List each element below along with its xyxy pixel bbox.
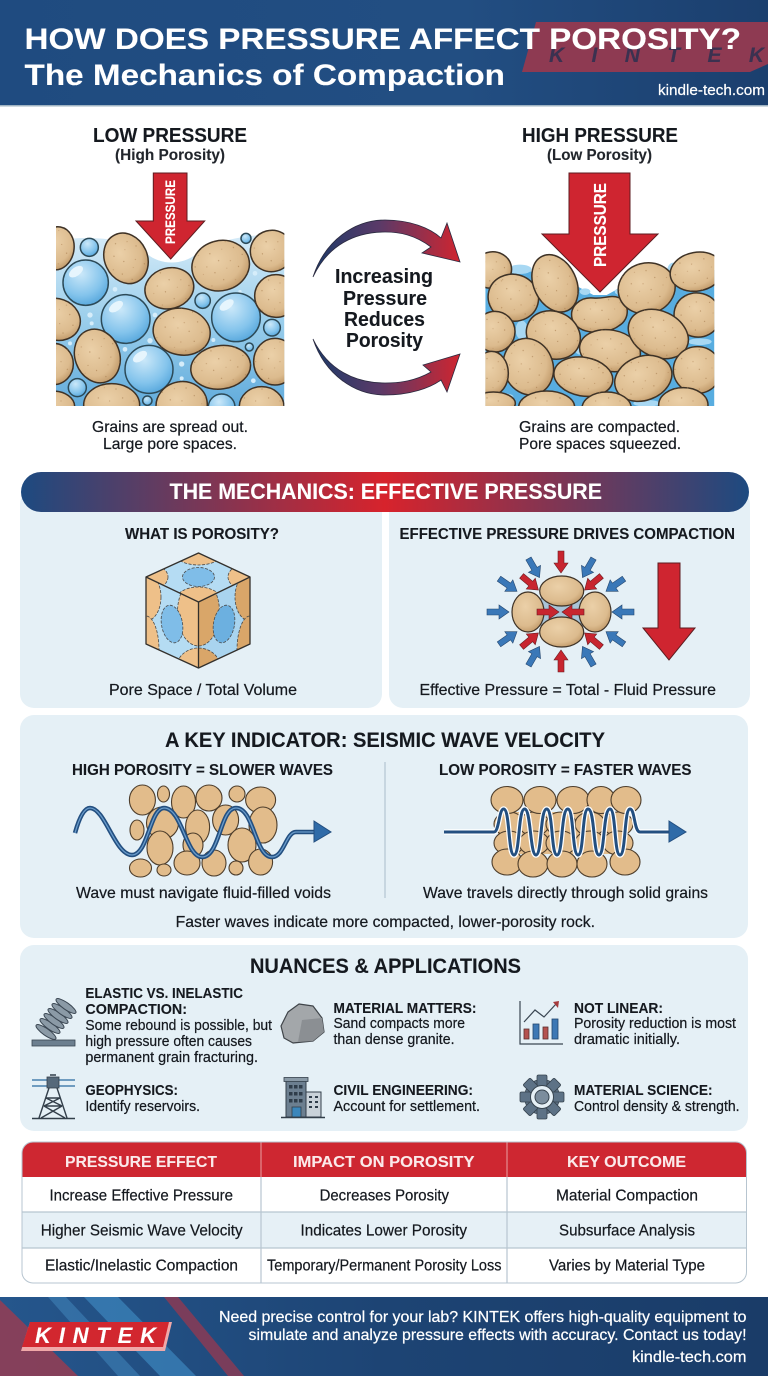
low pressure arrow [136,173,205,259]
text: material matters: Sand compacts more [334,1016,465,1032]
caption: slow wave: Wave must navigate fluid-filled voids [76,885,331,902]
footer banner [0,1297,768,1376]
text: elastic vs inelastic: ELASTIC VS. INELASTIC [85,985,243,1002]
text: geophysics: Identify reservoirs. [85,1099,200,1115]
text: material matters: MATERIAL MATTERS: [334,1000,476,1017]
low pressure heading [93,124,247,164]
text: elastic vs inelastic: high pressure often causes [85,1034,252,1050]
panel: what is porosity [20,490,382,708]
table row 1: Material Compaction [556,1188,698,1205]
heading: effective pressure: EFFECTIVE PRESSURE DRIVES COMPACTION [400,526,735,543]
high pressure heading [522,124,678,164]
watermark KINTEK logo [522,22,768,72]
text: civil engineering [334,1082,480,1115]
item: material matters [281,1000,476,1048]
low pressure heading: (High Porosity) [115,147,225,164]
header banner [0,0,768,106]
table row 2: Subsurface Analysis [559,1223,695,1240]
title line 2: The Mechanics of Compaction [24,59,505,92]
table row 3: Temporary/Permanent Porosity Loss [267,1258,502,1275]
low pressure caption [92,419,248,453]
table row 3: Varies by Material Type [549,1258,705,1275]
high pressure caption [519,419,681,453]
low pressure caption: Grains are spread out. [92,419,248,436]
section: the mechanics [20,472,750,708]
panel: high pressure [485,128,714,453]
text: elastic vs inelastic: COMPACTION: [85,1001,187,1018]
item: not linear [520,1000,736,1048]
heading: seismic: A KEY INDICATOR: SEISMIC WAVE VELOCITY [165,729,605,752]
call to action: Need precise control for your lab? KINTEK offers high-quality equipment to [219,1309,747,1326]
panel: effective pressure [389,490,750,708]
compacted grain illustration [485,251,714,406]
center label: Increasing [335,265,433,288]
diagram: stressed grains [487,551,634,672]
center label [335,265,433,352]
arrow: top curved [313,220,460,277]
text: civil engineering: Account for settlement. [334,1099,480,1115]
comparison table [22,1142,746,1283]
item: geophysics [32,1075,200,1118]
section title band [21,472,749,512]
watermark KINTEK logo: KINTEK [549,44,766,67]
text: material science: Control density & strength. [574,1099,740,1115]
table header row: IMPACT ON POROSITY [293,1154,475,1171]
text: civil engineering: CIVIL ENGINEERING: [334,1082,473,1099]
table header row: KEY OUTCOME [567,1154,686,1171]
table row 3 [45,1258,705,1275]
table row 1: Increase Effective Pressure [50,1188,233,1205]
table header row [65,1154,686,1171]
table row 1: Decreases Porosity [320,1188,449,1205]
high pressure caption: Pore spaces squeezed. [519,436,681,453]
panel: seismic wave velocity [20,715,748,938]
center label: Pressure [343,287,427,310]
section title band: THE MECHANICS: EFFECTIVE PRESSURE [170,479,602,504]
text: not linear [574,1000,736,1048]
call to action [219,1309,747,1366]
text: geophysics [85,1082,200,1115]
text: material matters: than dense granite. [334,1032,454,1048]
high pressure caption: Grains are compacted. [519,419,680,436]
table header row: PRESSURE EFFECT [65,1154,217,1171]
diagram: slow wave through loose grains [75,785,331,877]
text: elastic vs inelastic: permanent grain fracturing. [85,1050,258,1066]
text: material science [574,1082,740,1115]
text: elastic vs inelastic [85,985,272,1066]
panel: low pressure [56,128,284,453]
center label: Porosity [346,329,424,352]
icon: rock [281,1004,324,1043]
arrow: bottom curved [313,339,460,395]
low pressure arrow: PRESSURE [163,180,178,244]
table row 2: Higher Seismic Wave Velocity [41,1223,243,1240]
high pressure heading: (Low Porosity) [547,147,652,164]
panel: nuances and applications [20,945,748,1131]
low porosity grain illustration [56,226,284,406]
center cycle: increasing pressure reduces porosity [313,220,460,395]
low pressure heading: LOW PRESSURE [93,124,247,147]
low pressure caption: Large pore spaces. [103,436,237,453]
KINTEK logo: KINTEK [35,1323,158,1348]
call to action: kindle-tech.com [632,1349,746,1366]
text: geophysics: GEOPHYSICS: [85,1082,178,1099]
text: material matters [334,1000,476,1048]
icon: gear [520,1075,564,1119]
text: not linear: dramatic initially. [574,1032,680,1048]
high pressure heading: HIGH PRESSURE [522,124,678,147]
heading: nuances: NUANCES & APPLICATIONS [250,955,521,978]
formula: effective pressure: Effective Pressure = Total - Fluid Pressure [420,682,716,699]
text: not linear: Porosity reduction is most [574,1016,736,1032]
table row 2: Indicates Lower Porosity [300,1223,467,1240]
table row 1 [50,1188,698,1205]
arrow: big downward pressure [643,563,695,660]
center label: Reduces [344,308,425,331]
icon: building [281,1078,325,1118]
caption: fast wave: Wave travels directly through solid grains [423,885,708,902]
table row 3: Elastic/Inelastic Compaction [45,1258,238,1275]
icon: derrick tower [32,1075,75,1118]
item: elastic vs inelastic [32,985,272,1066]
item: civil engineering [281,1078,480,1118]
call to action: simulate and analyze pressure effects with accuracy. Contact us today! [248,1327,746,1344]
title line 1: HOW DOES PRESSURE AFFECT POROSITY? [24,23,741,56]
table row 2 [41,1223,695,1240]
subheading: low porosity: LOW POROSITY = FASTER WAVES [439,762,692,779]
heading: what is porosity: WHAT IS POROSITY? [125,526,279,543]
item: material science [520,1075,740,1119]
icon: spring [32,996,78,1046]
website url: kindle-tech.com [658,83,765,99]
text: elastic vs inelastic: Some rebound is possible, but [85,1018,272,1034]
text: not linear: NOT LINEAR: [574,1000,663,1017]
formula: porosity: Pore Space / Total Volume [109,682,297,699]
high pressure arrow: PRESSURE [590,183,610,267]
summary note: Faster waves indicate more compacted, lower-porosity rock. [176,914,595,931]
KINTEK logo [21,1322,172,1351]
diagram: fast wave through compacted grains [444,786,686,877]
icon: porosity cube [145,552,251,669]
icon: rising chart [520,1001,563,1044]
text: material science: MATERIAL SCIENCE: [574,1082,712,1099]
subheading: high porosity: HIGH POROSITY = SLOWER WAVES [72,762,333,779]
high pressure arrow [542,173,658,292]
